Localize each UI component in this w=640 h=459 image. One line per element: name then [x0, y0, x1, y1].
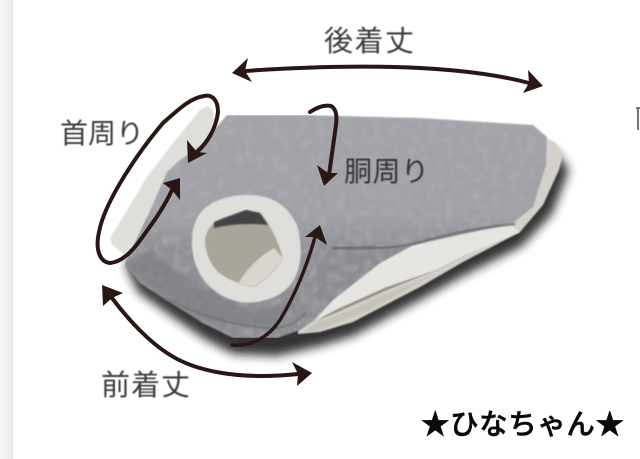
caption: Hina-chan credit: ★ひなちゃん★	[421, 409, 624, 441]
label: front length: 前着丈	[101, 369, 190, 402]
inner lining shadow gap	[318, 253, 470, 320]
armhole opening	[205, 210, 283, 287]
armhole collar	[192, 195, 301, 303]
cropped glyph fragment at right edge	[636, 108, 640, 130]
lower gray body panel	[125, 200, 413, 338]
bright cream lining band	[316, 225, 520, 320]
fold line shading	[333, 224, 515, 248]
arrow: body circumference down	[310, 106, 338, 186]
lower-left body shading	[127, 250, 300, 328]
arrow: front length	[102, 285, 312, 386]
lower lining fold	[303, 273, 437, 332]
arrow: body circumference up through armhole	[232, 225, 327, 345]
cream neck band	[110, 106, 214, 255]
arrow: back length	[232, 58, 543, 93]
label: body circumference: 胴周り	[344, 156, 429, 187]
lower hem fold shading	[165, 298, 306, 328]
garment drop shadow	[125, 150, 569, 356]
garment: fleece dog vest	[110, 106, 569, 356]
bottom lining layer	[296, 136, 563, 334]
label: back length: 後着丈	[324, 25, 414, 58]
arrow: neck circumference loop	[98, 96, 218, 263]
upper gray body panel	[125, 115, 547, 318]
left page edge strip	[0, 0, 13, 459]
label: neck circumference: 首周り	[60, 118, 144, 149]
armhole lining highlight	[238, 248, 283, 287]
armhole dark interior	[214, 210, 268, 228]
